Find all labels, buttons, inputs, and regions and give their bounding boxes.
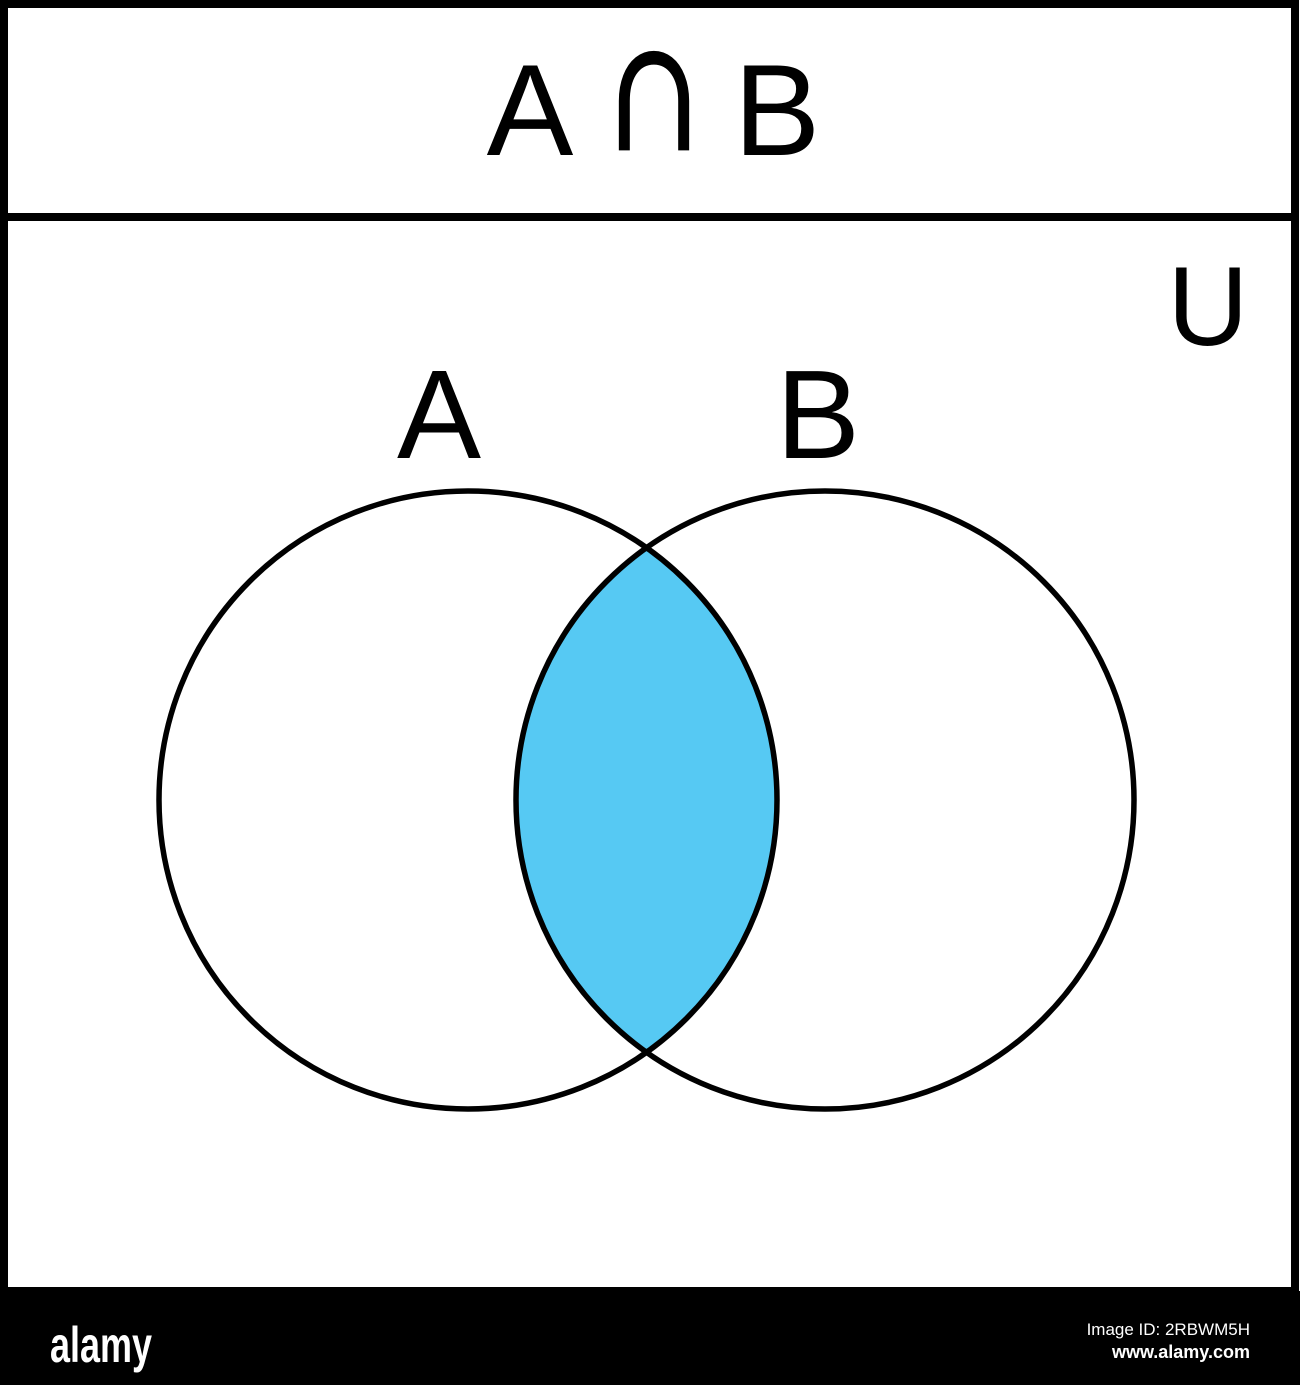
circle A	[159, 491, 777, 1109]
label: set B: B	[776, 344, 860, 485]
footer image id: Image ID: 2RBWM5H	[1087, 1320, 1250, 1339]
venn diagram	[159, 491, 1134, 1109]
label: universe U: U	[1168, 244, 1248, 369]
title: A	[487, 37, 574, 183]
intersection lens	[516, 548, 777, 1052]
circle B	[516, 491, 1134, 1109]
footer logo: alamy	[50, 1317, 152, 1373]
footer bar	[0, 1291, 1300, 1385]
label: set A: A	[397, 344, 481, 485]
footer url: www.alamy.com	[1111, 1342, 1250, 1362]
title	[487, 0, 820, 189]
title: B	[734, 37, 820, 183]
